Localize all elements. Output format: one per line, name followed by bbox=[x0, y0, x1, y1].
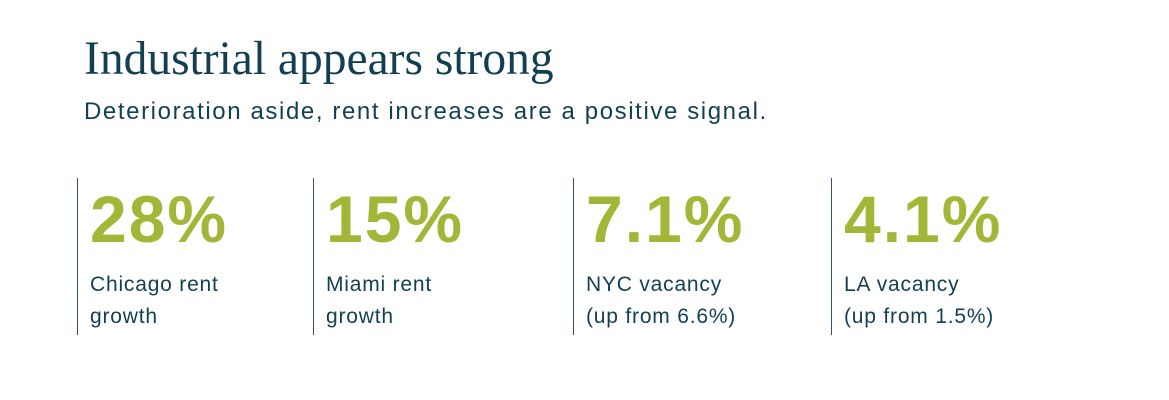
label bbox=[326, 273, 432, 328]
number: 15% bbox=[326, 182, 464, 256]
label: (up from 6.6%) bbox=[586, 305, 736, 328]
label bbox=[90, 273, 219, 328]
stat: Miami bbox=[313, 178, 554, 335]
stat: NYC bbox=[573, 178, 814, 335]
label bbox=[844, 273, 994, 328]
subtitle: Deterioration aside, rent increases are a positive signal. bbox=[84, 98, 768, 125]
number: 28% bbox=[90, 182, 228, 256]
label: growth bbox=[326, 305, 394, 328]
label: growth bbox=[90, 305, 158, 328]
stat: LA bbox=[831, 178, 1072, 335]
label: LA vacancy bbox=[844, 273, 959, 296]
title: Industrial appears strong bbox=[84, 33, 554, 85]
label: Miami rent bbox=[326, 273, 432, 296]
label: (up from 1.5%) bbox=[844, 305, 994, 328]
number: 4.1% bbox=[844, 182, 1002, 256]
stat: Chicago bbox=[77, 178, 298, 335]
number: 7.1% bbox=[586, 182, 744, 256]
label bbox=[586, 273, 736, 328]
label: Chicago rent bbox=[90, 273, 219, 296]
label: NYC vacancy bbox=[586, 273, 722, 296]
